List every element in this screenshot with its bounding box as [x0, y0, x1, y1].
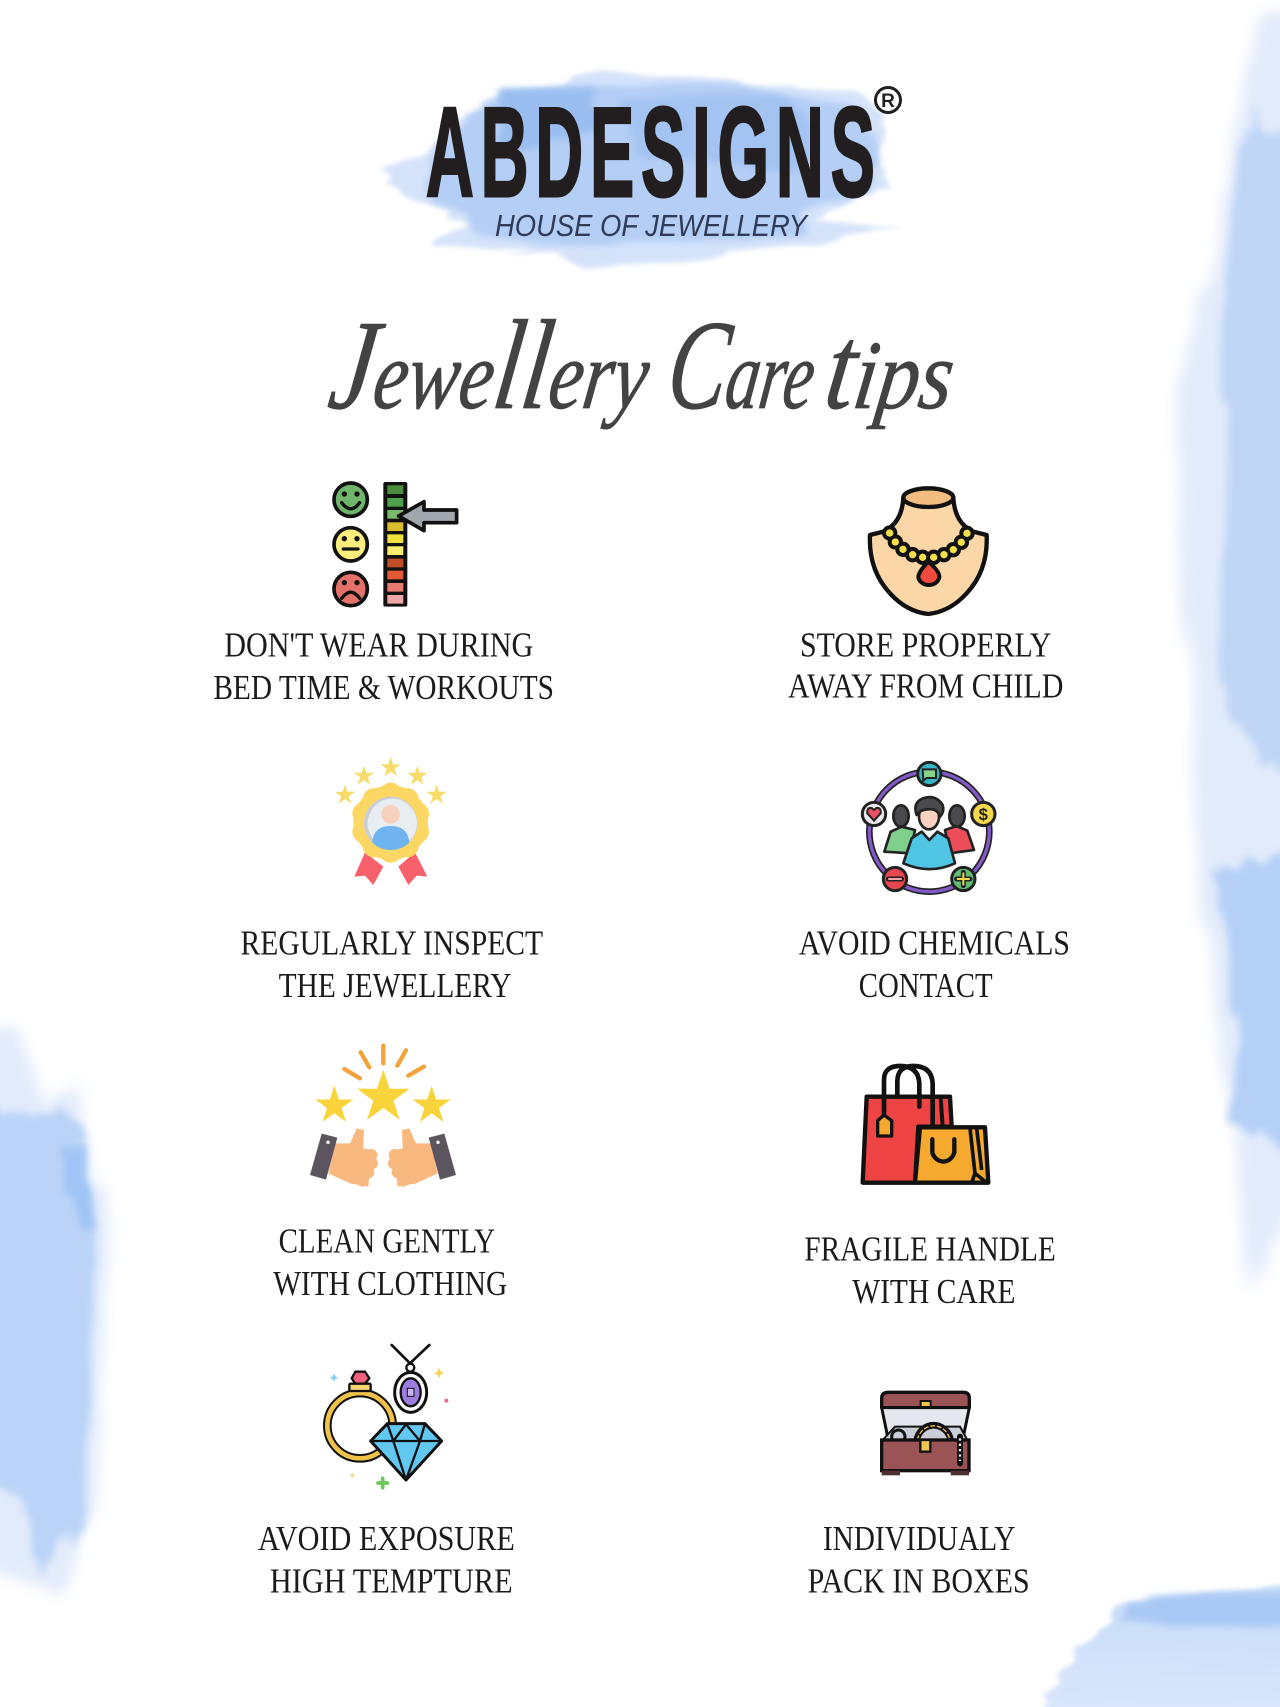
- title: Jewellery: [322, 294, 660, 436]
- tip text: individually pack: PACK IN BOXES: [808, 1561, 1030, 1600]
- icon: shopping bags: [863, 1066, 988, 1183]
- icon: people in circle: [862, 762, 995, 892]
- icon: medal with profile: [335, 757, 447, 885]
- tip text: clean gently: [273, 1222, 507, 1303]
- watercolour wash: right edge: [1178, 10, 1280, 1285]
- icon: stars and thumbs up: [310, 1046, 456, 1187]
- icon: ring, pendant and diamond: [327, 1345, 448, 1488]
- tip text: clean gently: CLEAN GENTLY: [279, 1222, 495, 1261]
- tip text: store properly: [788, 625, 1063, 706]
- tip text: avoid exposure: [258, 1519, 515, 1600]
- tip text: avoid exposure: HIGH TEMPTURE: [270, 1561, 513, 1600]
- tip text: fragile handle: FRAGILE HANDLE: [804, 1229, 1056, 1268]
- logo wordmark: ABDESIGNS: [426, 82, 875, 224]
- tip text: avoid chemicals: AVOID CHEMICALS: [799, 924, 1070, 963]
- logo brush stroke: [378, 75, 898, 270]
- tip text: avoid exposure: AVOID EXPOSURE: [258, 1519, 515, 1558]
- title: tips: [818, 303, 964, 435]
- tip text: fragile handle: [804, 1229, 1056, 1311]
- tip text: regularly inspect: THE JEWELLERY: [279, 966, 512, 1005]
- tip text: regularly inspect: REGULARLY INSPECT: [241, 924, 543, 963]
- tip text: bed time and workouts: DON'T WEAR DURING: [224, 625, 533, 664]
- registered mark: [876, 88, 900, 112]
- registered mark: R: [881, 91, 895, 112]
- centre person: [903, 797, 955, 869]
- tip text: avoid chemicals: CONTACT: [859, 966, 993, 1005]
- icon: necklace on bust: [870, 488, 987, 614]
- tip text: store properly: AWAY FROM CHILD: [788, 667, 1063, 706]
- icon: people in circle: $: [979, 805, 989, 824]
- tip text: bed time and workouts: [213, 625, 554, 707]
- side people: [884, 805, 974, 853]
- tip text: avoid chemicals: [799, 924, 1070, 1005]
- tip text: individually pack: INDIVIDUALY: [823, 1519, 1015, 1558]
- icon: jewellery box: [882, 1392, 969, 1475]
- tip text: individually pack: [808, 1519, 1030, 1600]
- tip text: regularly inspect: [241, 924, 543, 1005]
- logo tagline: HOUSE OF JEWELLERY: [495, 208, 809, 243]
- title: [322, 294, 964, 436]
- title: Care: [660, 294, 826, 436]
- logo: [378, 75, 900, 270]
- watercolour wash: bottom right: [1045, 1582, 1280, 1707]
- icon: mood meter: [334, 482, 457, 607]
- watercolour wash: left edge: [0, 1022, 107, 1595]
- tip text: clean gently: WITH CLOTHING: [273, 1264, 507, 1303]
- tip text: bed time and workouts: BED TIME & WORKOUTS: [213, 668, 554, 707]
- tip text: store properly: STORE PROPERLY: [800, 625, 1051, 664]
- tip text: fragile handle: WITH CARE: [852, 1272, 1015, 1311]
